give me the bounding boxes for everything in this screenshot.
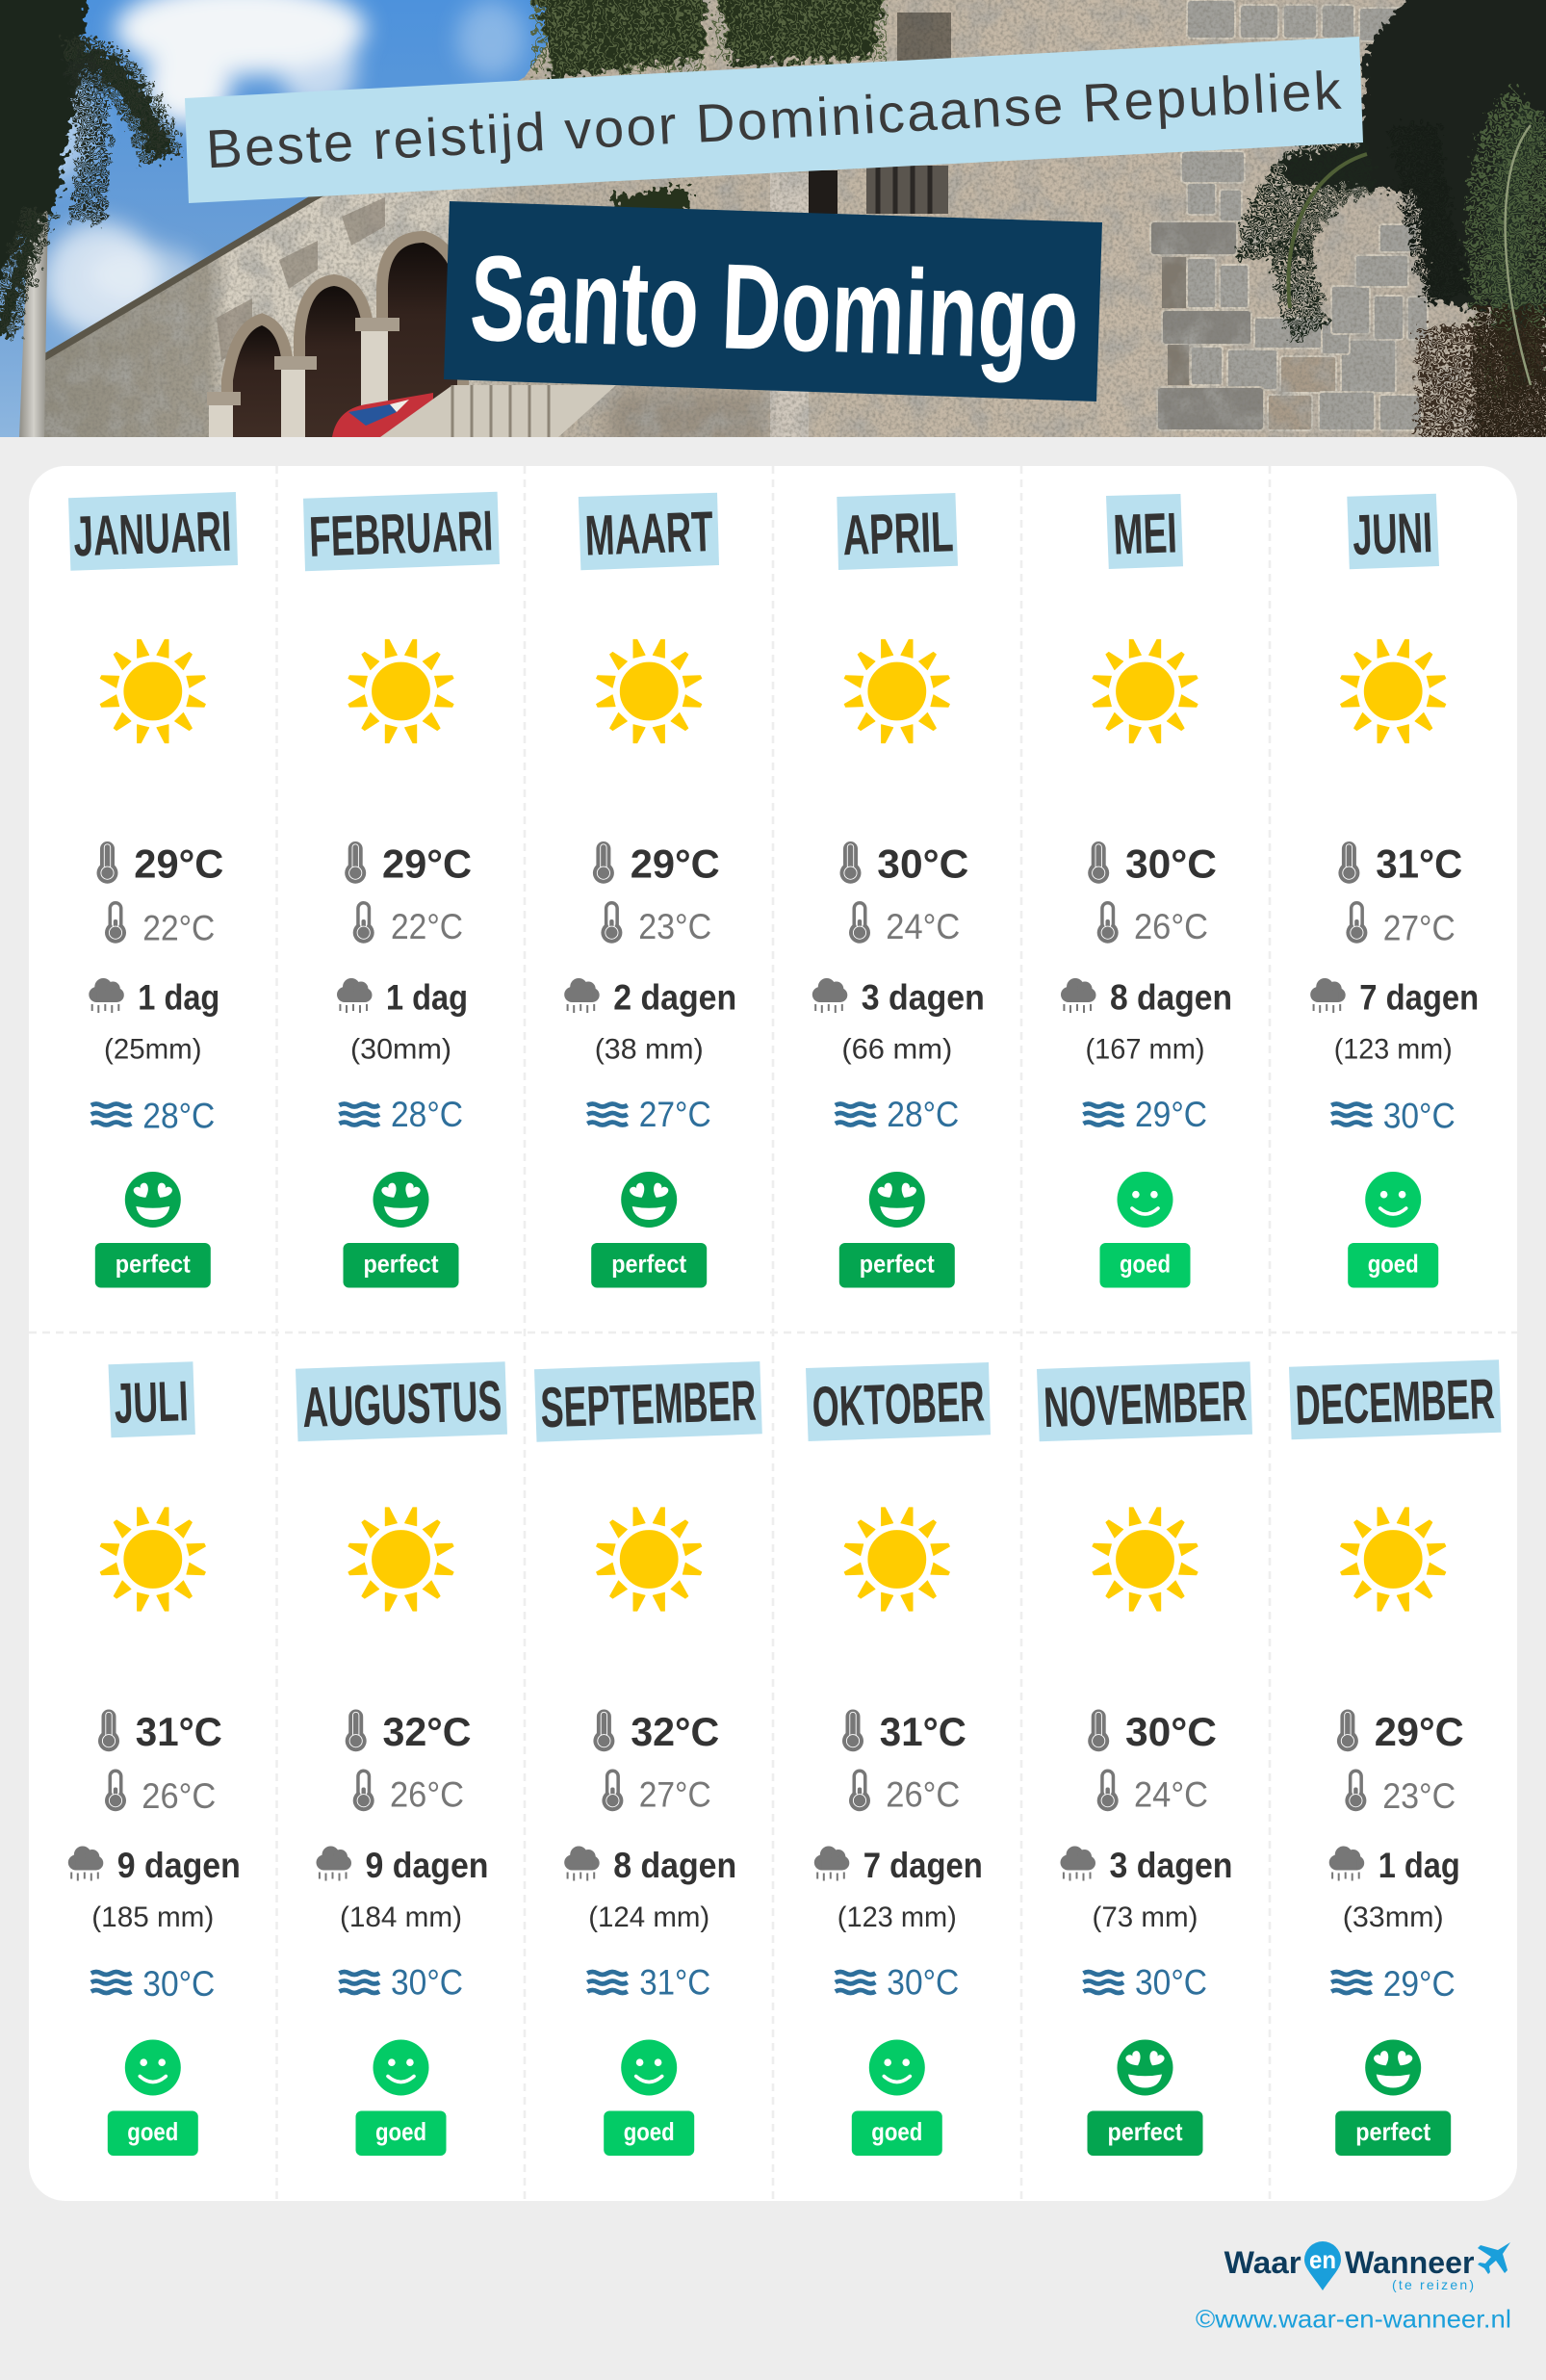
sea temperature <box>587 1962 710 2003</box>
rain days: 7 dagen <box>1359 977 1479 1017</box>
rain days <box>1061 977 1232 1017</box>
rainfall: (123 mm) <box>837 1901 957 1933</box>
min temperature <box>602 1770 711 1814</box>
min temperature: 27°C <box>639 1775 711 1814</box>
logo: Waar en Wanneer: Wanneer <box>1345 2245 1475 2280</box>
badge: goed: goed <box>624 2117 675 2146</box>
copyright url: ©www.waar-en-wanneer.nl <box>1196 2305 1511 2334</box>
badge: goed: goed <box>1368 1250 1419 1279</box>
heading: augustus <box>296 1361 507 1441</box>
rainfall: (124 mm) <box>588 1901 709 1933</box>
icon: sun <box>348 639 453 743</box>
icon: rating smiley <box>1117 1172 1172 1228</box>
logo: Waar en Wanneer <box>1224 2241 1510 2292</box>
max temperature: 31°C <box>1376 841 1462 887</box>
max temperature: 30°C <box>1125 841 1217 887</box>
icon: rating smiley <box>621 2039 677 2095</box>
rain days: 8 dagen <box>1110 977 1232 1017</box>
max temperature <box>593 1709 719 1754</box>
icon: sun <box>844 1508 949 1611</box>
photo: Santo Domingo colonial building with palms <box>0 0 1546 453</box>
banner: subtitle <box>185 37 1363 203</box>
max temperature <box>842 1709 966 1754</box>
sea temperature: 30°C <box>887 1962 959 2003</box>
sea temperature: 31°C <box>639 1962 710 2003</box>
sea temperature <box>1084 1962 1207 2003</box>
top palms <box>535 0 886 214</box>
sea temperature: 30°C <box>1383 1097 1456 1136</box>
icon: rating smiley <box>125 2039 181 2095</box>
rain days <box>1329 1846 1460 1885</box>
sea temperature: 30°C <box>1135 1962 1207 2003</box>
panel: september <box>534 1361 762 2156</box>
badge: perfect <box>343 1243 458 1288</box>
icon: rating smiley <box>374 2039 429 2095</box>
badge: goed <box>1099 1243 1190 1288</box>
badge: perfect <box>839 1243 955 1288</box>
flag <box>332 393 433 437</box>
max temperature: 29°C <box>382 841 472 887</box>
subtitle text: Beste reistijd voor Dominicaanse Republiek <box>205 60 1343 179</box>
badge: perfect: perfect <box>1107 2117 1183 2146</box>
left palm <box>19 202 48 437</box>
rain days: 3 dagen <box>862 977 985 1017</box>
rain days <box>1061 1846 1232 1885</box>
min temperature <box>849 1770 960 1814</box>
rainfall: (30mm) <box>350 1033 451 1065</box>
max temperature: 29°C <box>134 841 223 887</box>
min temperature <box>1097 901 1208 946</box>
min temperature: 22°C <box>142 909 215 948</box>
badge: goed: goed <box>127 2117 178 2146</box>
rain days <box>564 1846 736 1885</box>
icon: rating smiley <box>869 1172 925 1228</box>
sea temperature <box>836 1095 959 1134</box>
icon: sun <box>1340 639 1446 743</box>
min temperature <box>105 901 215 948</box>
min temperature: 26°C <box>142 1776 216 1816</box>
max temperature: 30°C <box>1125 1709 1217 1754</box>
rain days: 7 dagen <box>863 1846 983 1885</box>
heading: mei: MEI <box>1112 501 1178 567</box>
rain days: 8 dagen <box>613 1846 736 1885</box>
rain days <box>812 977 985 1017</box>
heading: oktober: OKTOBER <box>812 1369 986 1439</box>
sea temperature: 30°C <box>391 1962 463 2003</box>
icon: rating smiley <box>1365 2039 1421 2095</box>
rainfall: (66 mm) <box>841 1033 952 1065</box>
title text: Santo Domingo <box>468 230 1081 385</box>
icon: rating smiley <box>869 2039 925 2095</box>
max temperature <box>1338 841 1462 887</box>
icon: rating smiley <box>621 1172 677 1228</box>
panel: white month table <box>29 466 1517 2201</box>
min temperature: 24°C <box>1134 1775 1208 1814</box>
heading: juli <box>108 1361 195 1437</box>
badge: perfect: perfect <box>364 1250 439 1279</box>
sea temperature: 28°C <box>142 1097 215 1136</box>
rain days <box>814 1846 983 1885</box>
heading: januari: JANUARI <box>72 500 232 568</box>
icon: sun <box>1340 1508 1446 1611</box>
max temperature: 32°C <box>383 1709 472 1754</box>
header: photo with title banners <box>0 0 1546 453</box>
icon: sun <box>1093 1508 1198 1611</box>
rain days: 1 dag <box>1379 1846 1460 1885</box>
heading: februari: FEBRUARI <box>308 499 494 569</box>
rainfall: (184 mm) <box>340 1901 462 1933</box>
logo: Waar en Wanneer: (te reizen) <box>1392 2277 1474 2292</box>
rainfall: (38 mm) <box>595 1033 704 1065</box>
max temperature: 29°C <box>631 841 720 887</box>
sea temperature <box>1331 1097 1456 1136</box>
badge: perfect <box>1335 2110 1451 2156</box>
max temperature: 29°C <box>1375 1709 1464 1754</box>
rain days <box>316 1846 489 1885</box>
rain days <box>564 977 736 1017</box>
right palms <box>1275 0 1546 453</box>
rain days: 9 dagen <box>366 1846 489 1885</box>
rain days <box>68 1846 241 1885</box>
max temperature <box>98 1709 222 1754</box>
badge: perfect: perfect <box>860 1250 935 1279</box>
heading: januari <box>68 492 238 571</box>
heading: september <box>534 1361 762 1442</box>
badge: goed: goed <box>1120 1250 1171 1279</box>
icon: rating smiley <box>374 1172 429 1228</box>
panel: augustus <box>296 1361 507 2156</box>
rainfall: (25mm) <box>104 1033 202 1065</box>
rain days: 3 dagen <box>1109 1846 1232 1885</box>
rain days <box>1310 977 1479 1017</box>
icon: map pin: en <box>1309 2245 1336 2274</box>
min temperature <box>105 1770 216 1816</box>
sea temperature <box>587 1095 711 1134</box>
sea temperature <box>1331 1964 1456 2004</box>
icon: sun <box>348 1508 453 1611</box>
logo: Waar en Wanneer: Waar <box>1224 2245 1301 2280</box>
sea temperature: 29°C <box>1383 1964 1456 2004</box>
icon: sun <box>100 1508 206 1611</box>
badge: goed: goed <box>375 2117 426 2146</box>
banner: city title <box>444 201 1102 401</box>
min temperature: 23°C <box>638 907 711 946</box>
sea temperature <box>91 1097 215 1136</box>
heading: november <box>1037 1361 1252 1441</box>
heading: april <box>837 493 958 570</box>
badge: goed <box>1348 1243 1438 1288</box>
icon: map pin <box>1304 2241 1341 2290</box>
icon: rating smiley <box>1117 2039 1172 2095</box>
icon: rating smiley <box>125 1172 181 1228</box>
panel: november <box>1037 1361 1252 2156</box>
heading: mei <box>1106 494 1183 569</box>
panel: mei <box>1061 494 1232 1288</box>
rain days <box>337 977 468 1017</box>
icon: airplane <box>1478 2242 1510 2274</box>
min temperature <box>1345 1770 1456 1816</box>
rainfall: (185 mm) <box>91 1901 214 1933</box>
max temperature: 32°C <box>631 1709 719 1754</box>
min temperature: 22°C <box>391 907 463 946</box>
sea temperature: 29°C <box>1135 1095 1207 1134</box>
rainfall: (123 mm) <box>1334 1033 1453 1065</box>
badge: goed <box>108 2110 198 2156</box>
heading: november: NOVEMBER <box>1043 1369 1248 1439</box>
rainfall: (167 mm) <box>1086 1033 1205 1065</box>
heading: juli: JULI <box>113 1369 190 1436</box>
icon: sun <box>100 639 206 743</box>
rain days: 9 dagen <box>117 1846 241 1885</box>
panel: april <box>812 493 985 1288</box>
badge: perfect: perfect <box>116 1250 191 1279</box>
max temperature: 31°C <box>880 1709 966 1754</box>
badge: perfect: perfect <box>611 1250 687 1279</box>
min temperature <box>1346 901 1456 948</box>
panel: februari <box>303 492 500 1288</box>
sea temperature <box>1084 1095 1207 1134</box>
heading: oktober <box>806 1362 991 1441</box>
rainfall: (73 mm) <box>1092 1901 1198 1933</box>
sea temperature: 28°C <box>887 1095 959 1134</box>
rain days: 1 dag <box>386 977 468 1017</box>
sea temperature <box>91 1964 215 2004</box>
heading: maart: MAART <box>584 500 714 568</box>
icon: sun <box>597 639 702 743</box>
panel: maart <box>564 493 736 1288</box>
rain days <box>89 977 219 1017</box>
badge: goed <box>852 2110 942 2156</box>
min temperature: 23°C <box>1382 1776 1456 1816</box>
badge: goed <box>356 2110 447 2156</box>
heading: april: APRIL <box>841 500 954 567</box>
icon: sun <box>1093 639 1198 743</box>
panel: juni <box>1310 494 1479 1288</box>
badge: goed <box>604 2110 694 2156</box>
panel: oktober <box>806 1362 991 2156</box>
sea temperature: 27°C <box>639 1095 711 1134</box>
min temperature <box>849 901 960 946</box>
sea temperature: 30°C <box>142 1964 215 2004</box>
min temperature: 26°C <box>390 1775 464 1814</box>
min temperature <box>353 1770 464 1814</box>
max temperature: 31°C <box>136 1709 222 1754</box>
min temperature <box>1097 1770 1208 1814</box>
badge: goed: goed <box>871 2117 922 2146</box>
min temperature: 26°C <box>1134 907 1208 946</box>
icon: sun <box>844 639 949 743</box>
max temperature <box>346 1709 472 1754</box>
min temperature: 27°C <box>1383 909 1456 948</box>
badge: perfect <box>1088 2110 1203 2156</box>
heading: juni: JUNI <box>1352 501 1433 567</box>
panel: januari <box>68 492 238 1288</box>
badge: perfect <box>95 1243 211 1288</box>
sea temperature <box>339 1095 463 1134</box>
min temperature <box>353 901 463 946</box>
badge: perfect: perfect <box>1355 2117 1431 2146</box>
sea temperature <box>836 1962 959 2003</box>
rain days: 1 dag <box>138 977 219 1017</box>
icon: rating smiley <box>1365 1172 1421 1228</box>
heading: augustus: AUGUSTUS <box>301 1369 502 1439</box>
heading: maart <box>579 493 719 570</box>
heading: februari <box>303 492 500 571</box>
icon: sun <box>597 1508 702 1611</box>
sea temperature: 28°C <box>391 1095 463 1134</box>
badge: perfect <box>591 1243 707 1288</box>
min temperature <box>601 901 711 946</box>
rain days: 2 dagen <box>613 977 736 1017</box>
heading: september: SEPTEMBER <box>539 1369 758 1439</box>
max temperature: 30°C <box>877 841 968 887</box>
panel: juli <box>68 1361 241 2156</box>
sea temperature <box>339 1962 463 2003</box>
heading: juni <box>1347 494 1439 569</box>
panel: december <box>1289 1359 1501 2156</box>
min temperature: 26°C <box>886 1775 960 1814</box>
min temperature: 24°C <box>886 907 960 946</box>
rainfall: (33mm) <box>1343 1901 1444 1933</box>
